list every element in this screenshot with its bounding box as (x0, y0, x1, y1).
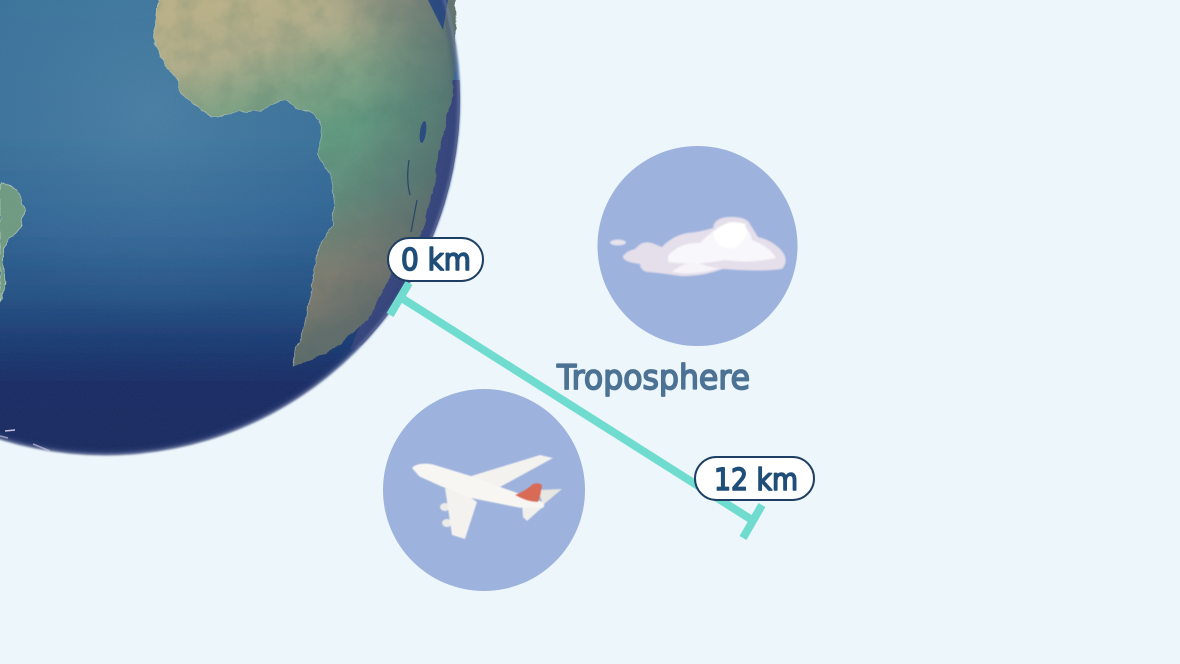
plane badge (383, 389, 585, 591)
continent: Africa (150, 0, 460, 370)
label: 12 km (695, 457, 814, 500)
circle (598, 146, 798, 346)
label: 0 km (388, 238, 483, 281)
end cap at 12 km (743, 505, 762, 538)
lake (418, 121, 428, 143)
rift lines (408, 160, 417, 232)
end cap at 0 km (390, 283, 409, 315)
Red Sea (428, 0, 448, 30)
Antarctic ice specks (0, 430, 50, 451)
surface grain (0, 0, 462, 456)
globe (0, 0, 470, 456)
ocean highlight (70, 32, 231, 216)
ocean (0, 0, 460, 455)
cloud badge (598, 146, 798, 346)
label: Troposphere: Troposphere (556, 358, 750, 398)
label: 12 km: 12 km (714, 463, 798, 498)
Indian ocean crescent (350, 80, 470, 350)
atmosphere rim (0, 0, 460, 455)
icon: cloud (610, 217, 786, 276)
continent: South America (0, 182, 25, 303)
line (400, 297, 752, 520)
icon: airplane (413, 455, 562, 539)
circle (383, 389, 585, 591)
label: 0 km: 0 km (401, 243, 471, 278)
altitude line: troposphere span (390, 283, 762, 538)
